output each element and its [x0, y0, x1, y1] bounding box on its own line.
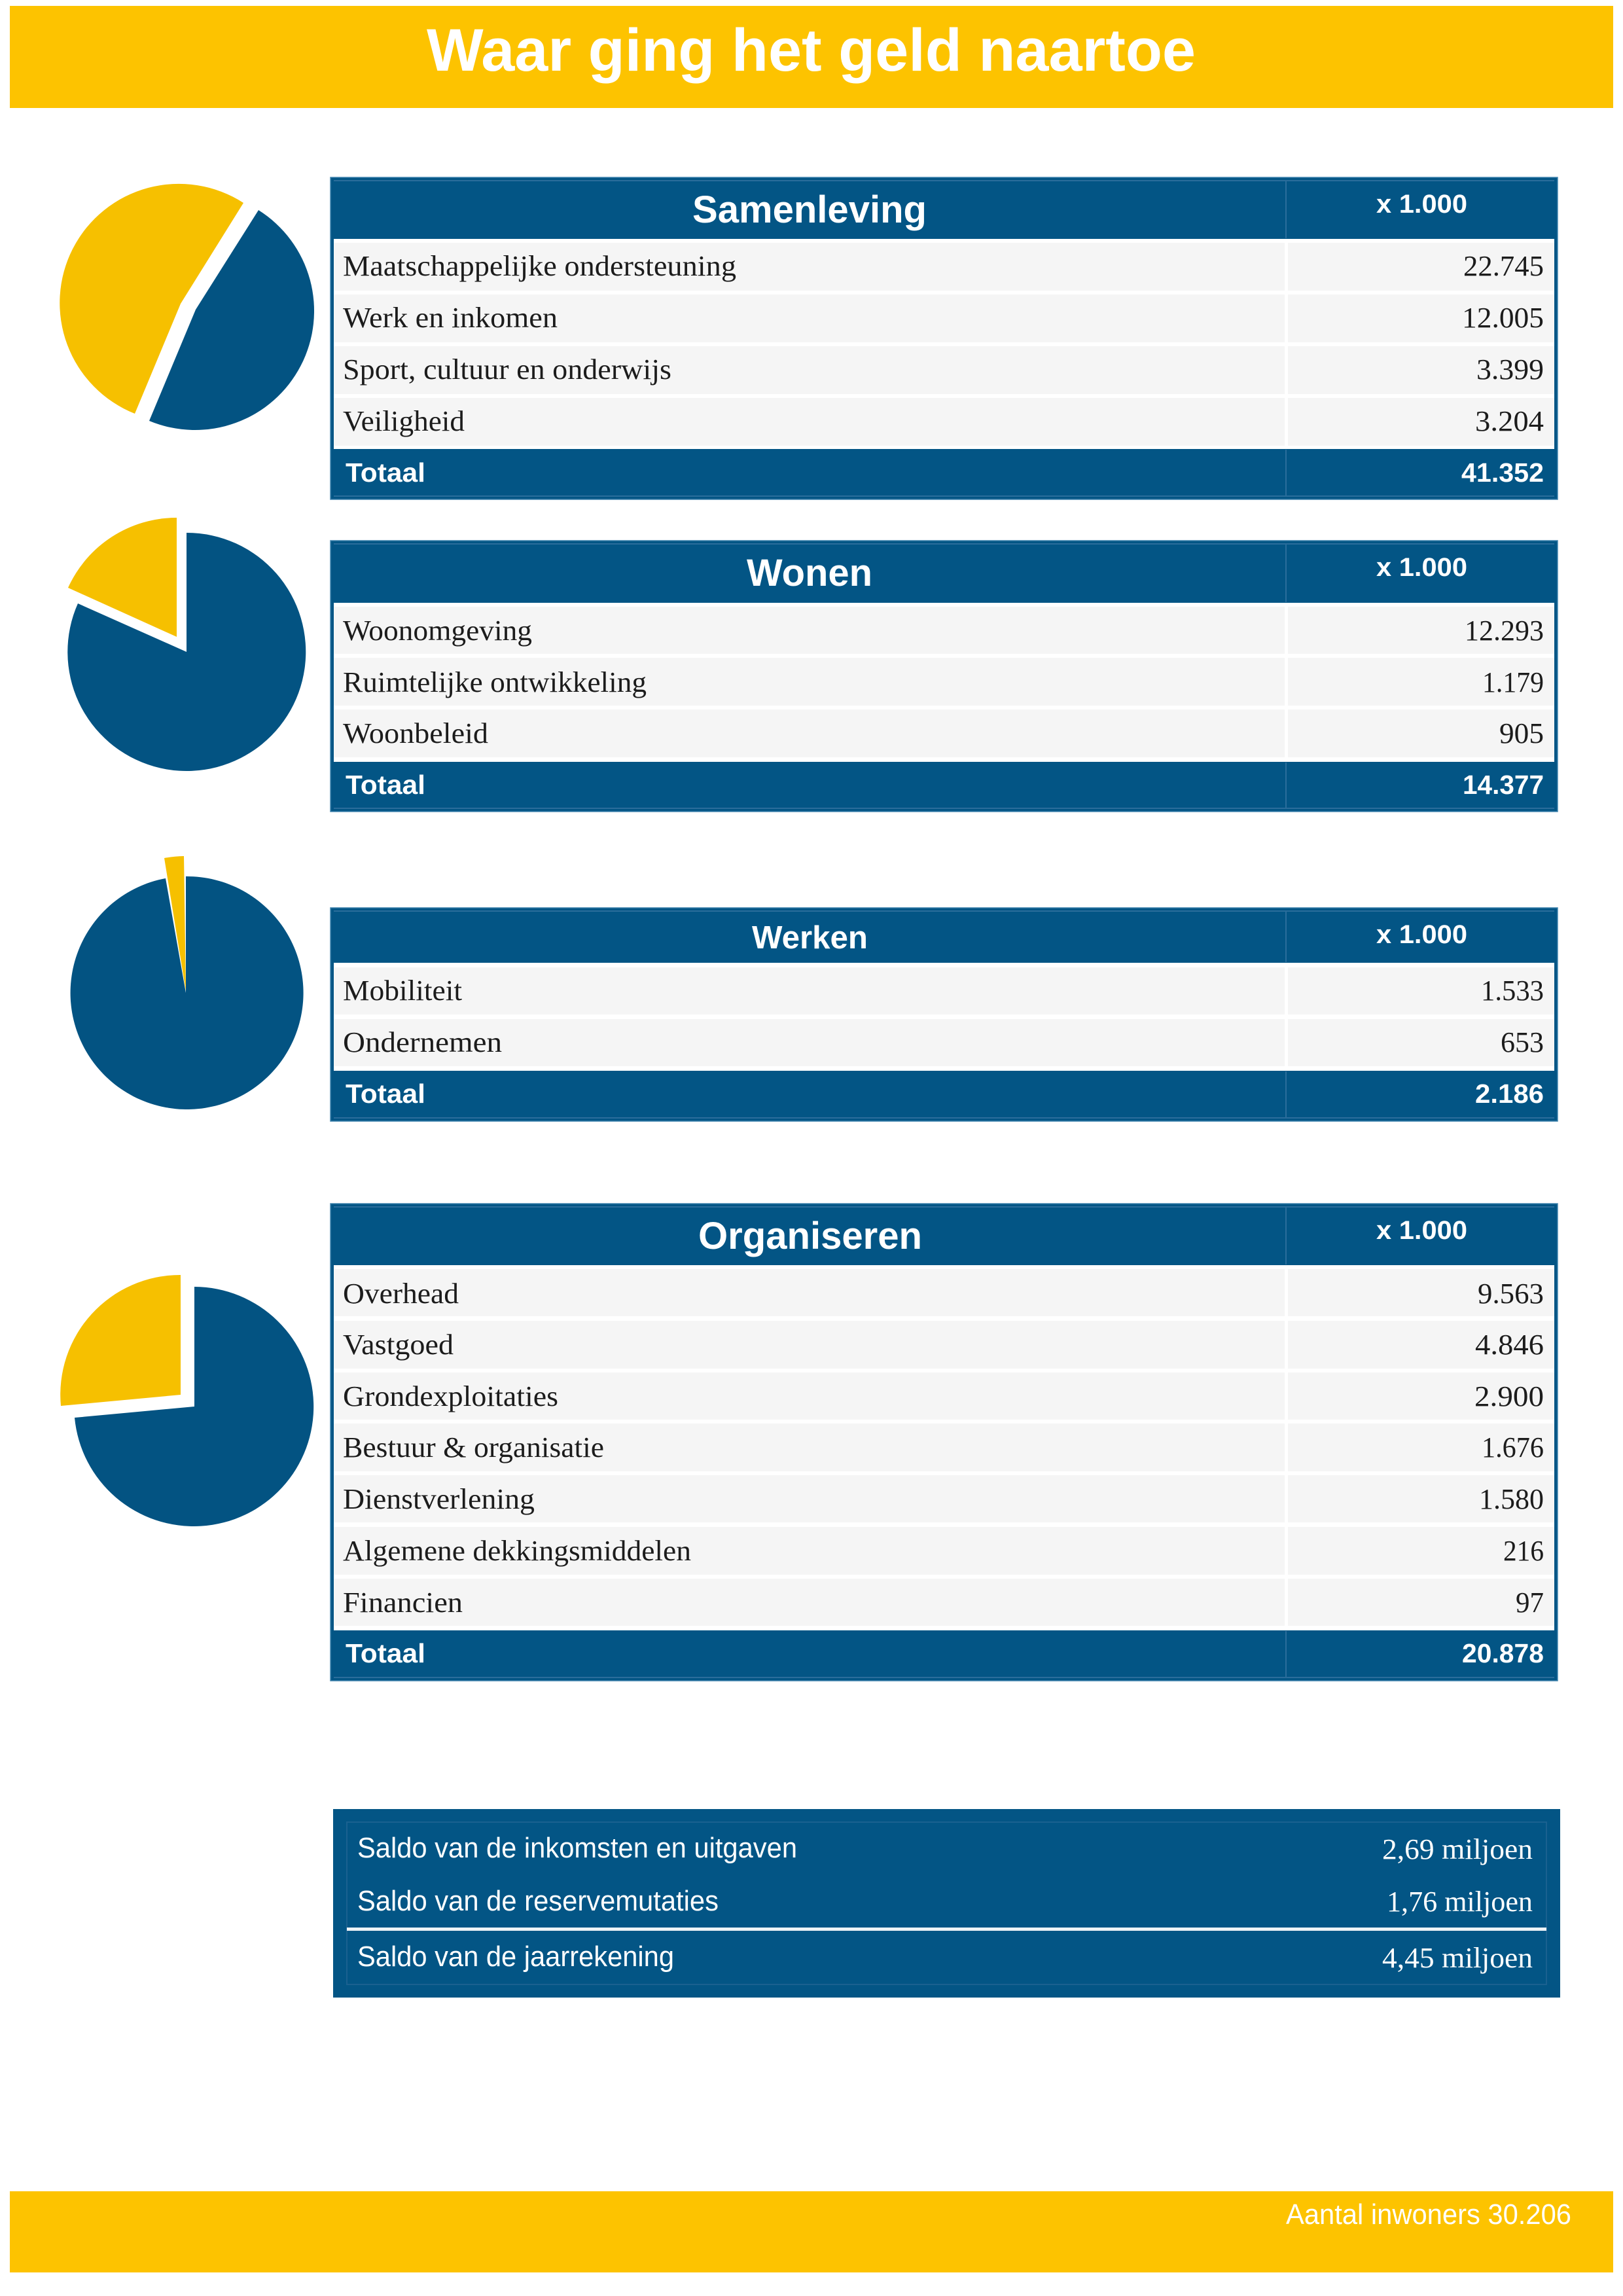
- row: saldo reservemutaties: 1,76 miljoen: [1387, 1886, 1533, 1918]
- pie chart: Organiseren: [60, 1275, 313, 1526]
- row: Financien: [334, 1579, 1554, 1626]
- total row: 20.878: [1462, 1638, 1544, 1668]
- total row: 41.352: [1461, 457, 1544, 488]
- row: Overhead: 9.563: [1478, 1278, 1544, 1310]
- row: Ruimtelijke ontwikkeling: [334, 658, 1554, 706]
- row: Grondexploitaties: 2.900: [1474, 1380, 1544, 1412]
- row: Mobiliteit: Mobiliteit: [343, 975, 462, 1007]
- row: saldo inkomsten en uitgaven: 2,69 miljoen: [1382, 1833, 1533, 1865]
- row: Grondexploitaties: [334, 1372, 1554, 1420]
- row: Algemene dekkingsmiddelen: 216: [1503, 1535, 1544, 1567]
- row: Dienstverlening: [334, 1475, 1554, 1522]
- row: Woonbeleid: [334, 709, 1554, 757]
- row: Vastgoed: 4.846: [1475, 1329, 1544, 1361]
- row: Bestuur & organisatie: [334, 1424, 1554, 1471]
- row: Algemene dekkingsmiddelen: [334, 1527, 1554, 1575]
- row: Woonomgeving: [334, 607, 1554, 654]
- heading: Samenleving: Samenleving: [692, 188, 927, 231]
- row: saldo reservemutaties: [357, 1885, 1533, 1918]
- row: Grondexploitaties: Grondexploitaties: [343, 1380, 558, 1412]
- row: saldo inkomsten en uitgaven: [357, 1832, 1533, 1865]
- row: Veiligheid: [334, 398, 1554, 446]
- row: saldo jaarrekening: Saldo van de jaarrekening: [357, 1941, 674, 1973]
- title: Waar ging het geld naartoe: [427, 17, 1196, 84]
- row: saldo inkomsten en uitgaven: Saldo van de inkomsten en uitgaven: [357, 1832, 797, 1864]
- total row: 14.377: [1463, 770, 1544, 800]
- row: Overhead: Overhead: [343, 1278, 459, 1310]
- row: Woonomgeving: 12.293: [1465, 615, 1544, 647]
- title banner: [10, 6, 1613, 108]
- row: Veiligheid: 3.204: [1475, 405, 1544, 437]
- row: Dienstverlening: 1.580: [1479, 1483, 1544, 1515]
- row: Maatschappelijke ondersteuning: Maatschappelijke ondersteuning: [343, 250, 736, 282]
- row: Bestuur & organisatie: Bestuur & organisatie: [343, 1431, 604, 1463]
- footer banner: [10, 2191, 1613, 2272]
- row: Financien: 97: [1516, 1587, 1544, 1619]
- row: Bestuur & organisatie: 1.676: [1482, 1431, 1544, 1463]
- total row: Totaal: [346, 1079, 425, 1109]
- row: Vastgoed: Vastgoed: [343, 1329, 454, 1361]
- row: Werk en inkomen: Werk en inkomen: [343, 302, 558, 334]
- pie chart: Werken: [71, 856, 304, 1109]
- row: Vastgoed: [334, 1321, 1554, 1369]
- panel: Werken table: [330, 908, 1558, 1121]
- footer text: Aantal inwoners 30.206: [1286, 2198, 1571, 2231]
- row: Ruimtelijke ontwikkeling: 1.179: [1482, 666, 1544, 698]
- column unit: x 1.000: [1376, 1216, 1467, 1245]
- row: Mobiliteit: 1.533: [1481, 975, 1544, 1007]
- column unit: x 1.000: [1376, 190, 1467, 219]
- panel: Organiseren table: [330, 1204, 1558, 1681]
- row: Ondernemen: 653: [1501, 1026, 1544, 1058]
- pie chart: Samenleving: [60, 184, 314, 430]
- pie chart: Wonen: [67, 518, 306, 771]
- heading: Organiseren: Organiseren: [698, 1215, 922, 1257]
- row: Woonbeleid: 905: [1499, 717, 1544, 749]
- row: Maatschappelijke ondersteuning: [334, 243, 1554, 291]
- row: Financien: Financien: [343, 1587, 463, 1619]
- heading: Wonen: Wonen: [747, 552, 872, 594]
- row: Sport, cultuur en onderwijs: 3.399: [1476, 353, 1544, 386]
- row: saldo jaarrekening: [357, 1941, 1533, 1974]
- row: Werk en inkomen: 12.005: [1462, 302, 1544, 334]
- row: saldo reservemutaties: Saldo van de reservemutaties: [357, 1885, 719, 1917]
- row: Sport, cultuur en onderwijs: [334, 346, 1554, 394]
- column unit: x 1.000: [1376, 553, 1467, 582]
- row: Woonomgeving: Woonomgeving: [343, 615, 532, 647]
- row: Maatschappelijke ondersteuning: 22.745: [1463, 250, 1544, 282]
- row: Ruimtelijke ontwikkeling: Ruimtelijke ontwikkeling: [343, 666, 647, 698]
- heading: Werken: Werken: [752, 920, 868, 956]
- row: Overhead: [334, 1269, 1554, 1316]
- row: saldo jaarrekening: 4,45 miljoen: [1382, 1942, 1533, 1974]
- total row: [346, 1079, 1544, 1109]
- row: Algemene dekkingsmiddelen: Algemene dekkingsmiddelen: [343, 1535, 691, 1567]
- row: Sport, cultuur en onderwijs: Sport, cultuur en onderwijs: [343, 353, 671, 386]
- row: Mobiliteit: [334, 967, 1554, 1014]
- total row: Totaal: [346, 457, 425, 488]
- total row: Totaal: [346, 770, 425, 800]
- row: Dienstverlening: Dienstverlening: [343, 1483, 535, 1515]
- total row: 2.186: [1475, 1079, 1544, 1109]
- row: Veiligheid: Veiligheid: [343, 405, 465, 437]
- total row: [346, 1638, 1544, 1668]
- row: Werk en inkomen: [334, 295, 1554, 342]
- panel: Samenleving table: [330, 177, 1558, 499]
- row: Ondernemen: [334, 1019, 1554, 1066]
- total row: Totaal: [346, 1638, 425, 1668]
- panel: saldo summary: [333, 1809, 1560, 1998]
- row: Ondernemen: Ondernemen: [343, 1026, 502, 1058]
- total row: [346, 770, 1544, 800]
- panel: Wonen table: [330, 541, 1558, 812]
- row: Woonbeleid: Woonbeleid: [343, 717, 488, 749]
- column unit: x 1.000: [1376, 920, 1467, 949]
- total row: [346, 457, 1544, 488]
